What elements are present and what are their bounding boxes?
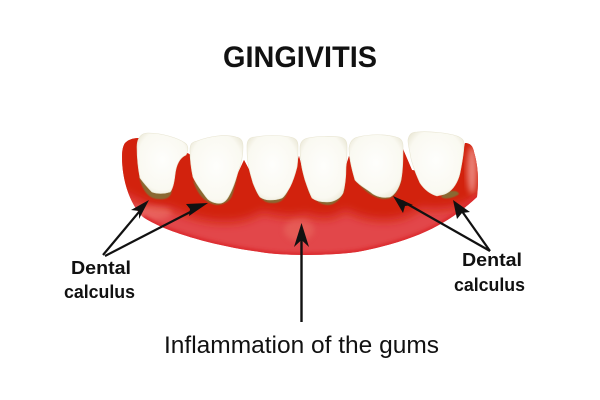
label: inflammation of the gums: Inflammation of the gums — [164, 332, 439, 359]
title: GINGIVITIS — [223, 41, 377, 74]
arrows: right dental calculus — [393, 196, 490, 251]
tooth 3 — [247, 136, 298, 200]
label: right dental calculus: calculus — [454, 275, 525, 295]
tooth 6 — [408, 132, 464, 196]
calculus deposits — [139, 176, 459, 205]
tooth 4 — [300, 136, 347, 202]
infographic canvas — [64, 46, 524, 358]
teeth — [137, 132, 464, 203]
gums — [122, 138, 478, 255]
illustration: gums and teeth — [115, 130, 485, 260]
label: left dental calculus: Dental — [71, 258, 131, 278]
tooth 2 — [190, 136, 243, 203]
label: left dental calculus — [64, 258, 135, 302]
tooth 5 — [349, 135, 403, 197]
arrow: inflammation — [294, 223, 309, 322]
arrows: left dental calculus — [103, 200, 208, 256]
label: right dental calculus — [454, 250, 525, 295]
tooth 1 — [137, 133, 188, 194]
label: right dental calculus: Dental — [462, 250, 522, 270]
label: left dental calculus: calculus — [64, 282, 135, 302]
